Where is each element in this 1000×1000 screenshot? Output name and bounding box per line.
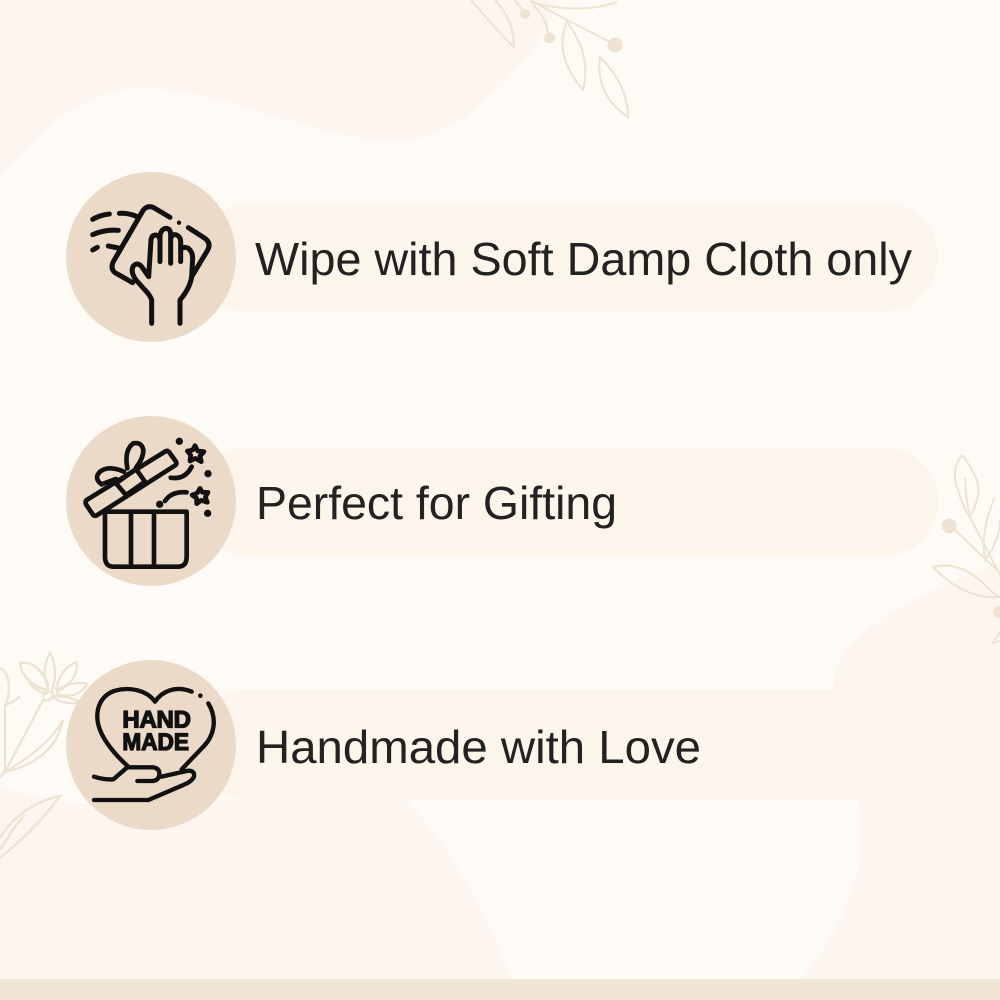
circle badge: row 1 <box>66 172 236 342</box>
pill: row 3 <box>195 690 940 800</box>
icon: open gift box <box>86 440 209 567</box>
label: handmade: Handmade with Love <box>256 721 701 773</box>
icon: hand wiping cloth <box>93 207 209 323</box>
floral decoration: right <box>933 455 1000 643</box>
label: gifting: Perfect for Gifting <box>256 477 617 529</box>
pill: row 2 <box>195 447 938 556</box>
row 1 <box>66 172 938 342</box>
background blob: top left <box>0 0 556 176</box>
background blob: bottom left <box>0 788 512 980</box>
floral decoration: left <box>0 653 87 858</box>
pill: row 1 <box>195 203 938 312</box>
row 3 <box>66 660 940 830</box>
icon: handmade heart in hand: MADE <box>122 729 189 756</box>
icon: handmade heart in hand <box>94 689 214 800</box>
floral decoration: top <box>471 0 628 117</box>
label: wipe: Wipe with Soft Damp Cloth only <box>255 233 912 285</box>
background blob: right <box>800 563 1000 980</box>
circle badge: row 2 <box>66 416 236 586</box>
circle badge: row 3 <box>66 660 236 830</box>
icon text: hand made: HAND <box>122 706 191 733</box>
bottom strip <box>0 979 1000 1000</box>
row 2 <box>66 416 938 586</box>
